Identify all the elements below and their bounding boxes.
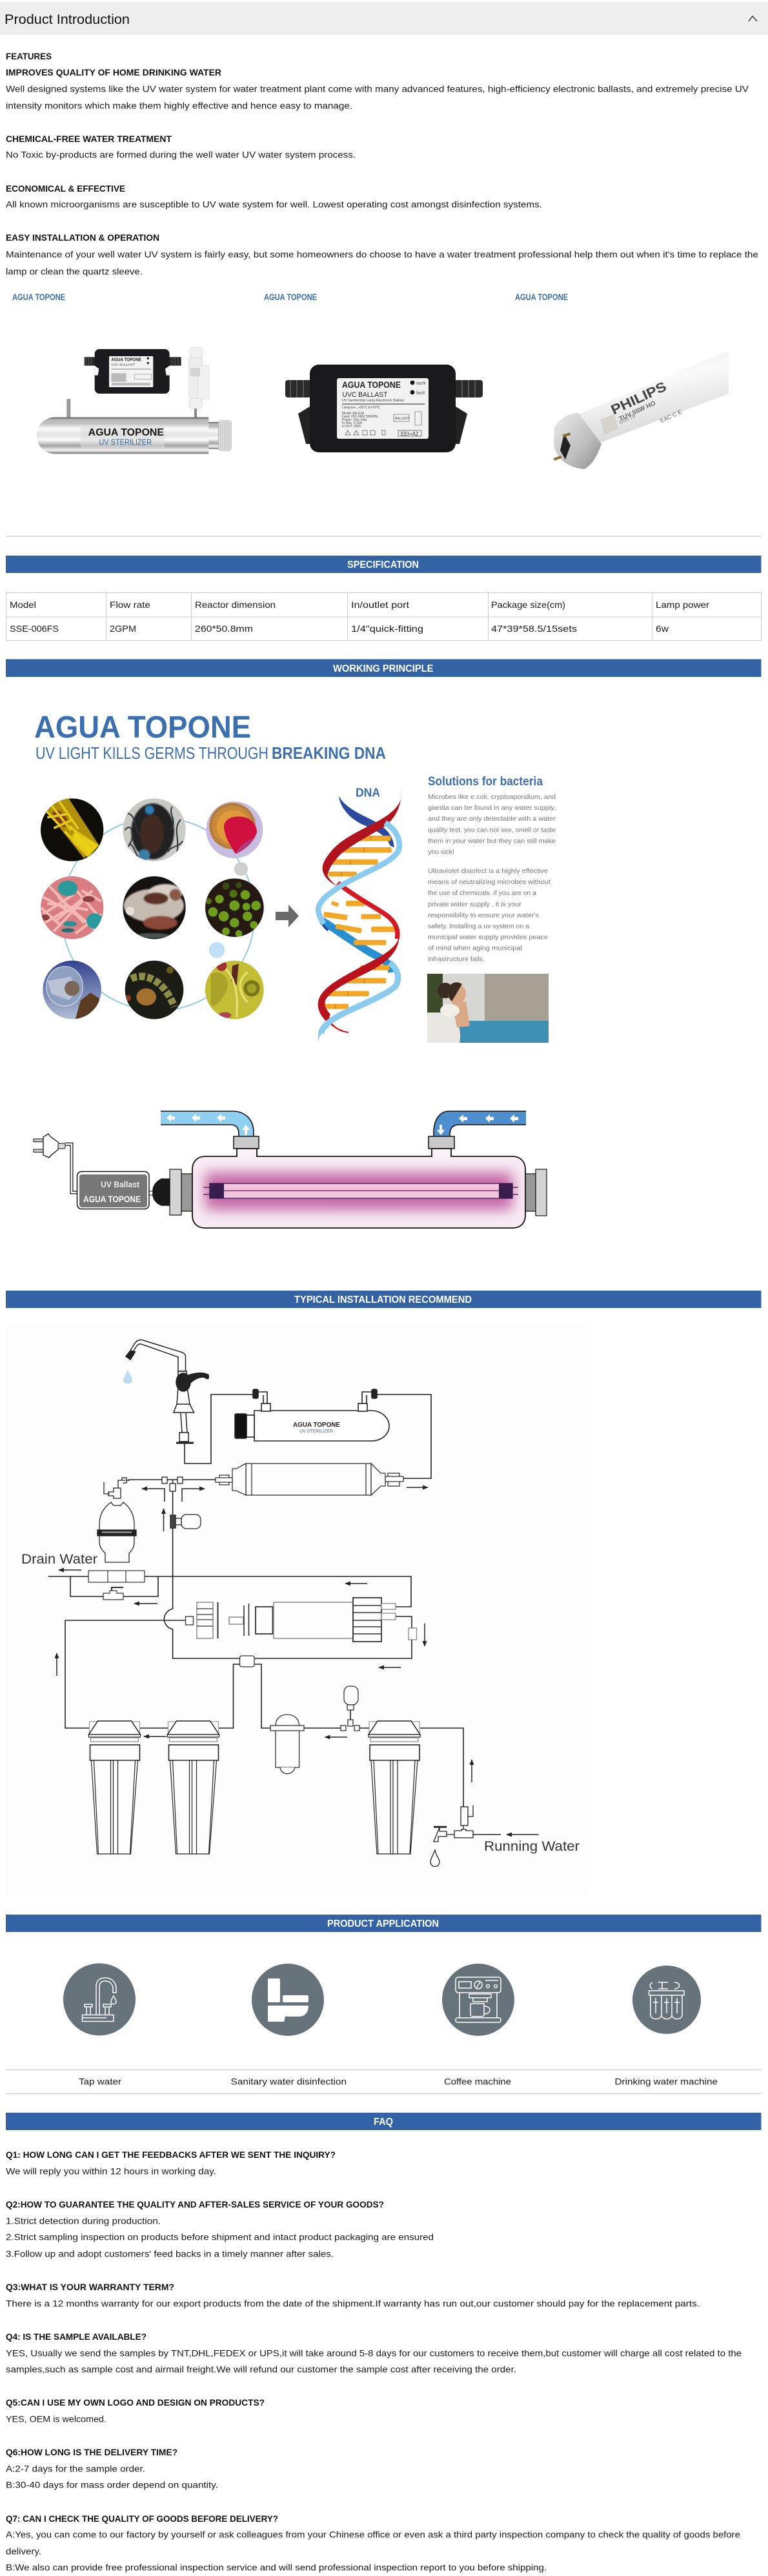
- flow restrictor and bypass valve: [88, 1571, 145, 1600]
- text block: solutions for bacteria: them in your water but they can still make: [428, 838, 556, 845]
- application: drinking water machine: [614, 1966, 718, 2087]
- section band: FAQ: [6, 2113, 762, 2130]
- text block: FAQ: There is a 12 months warranty for our export products from the date of the shipment.If warranty has run out,our customer should pay for the replacement parts.: [6, 2299, 700, 2309]
- section band: product application: PRODUCT APPLICATION: [327, 1918, 439, 1929]
- panel: product photo, sterilizer kit: [12, 292, 231, 454]
- UV lamp illustration: TUV 55W HO: [618, 400, 657, 423]
- text block: solutions for bacteria: Ultraviolet disinfect is a highly effective: [428, 867, 548, 875]
- text block: solutions for bacteria: quality test. you can not see, smell or taste: [428, 826, 556, 834]
- ballast illustration: Model: EB-G16: [342, 412, 364, 416]
- text block: solutions for bacteria: responsibility to ensure your water's: [428, 911, 539, 919]
- UV lamp illustration: G55 T8: [618, 413, 636, 425]
- text block: solutions for bacteria: Microbes like e.coli, cryptosporidium, and: [428, 793, 556, 801]
- text block: solutions for bacteria: private water supply , it is your: [428, 901, 522, 909]
- text block: FAQ: delivery.: [6, 2546, 41, 2557]
- text block: solutions for bacteria: giardia can be found in any water supply,: [428, 804, 556, 812]
- UV ballast box: AGUA TOPONE: [83, 1194, 141, 1204]
- label: drain water: Drain Water: [21, 1552, 97, 1567]
- UV lamp illustration: PHILIPS: [609, 379, 669, 418]
- table: specification: Package size(cm): [491, 599, 565, 610]
- logo: AGUA TOPONE: [515, 292, 568, 302]
- icon: filter cartridges: [632, 1966, 701, 2034]
- section band: working principle: WORKING PRINCIPLE: [333, 663, 434, 674]
- text block: FAQ: Q7: CAN I CHECK THE QUALITY OF GOODS BEFORE DELIVERY?: [6, 2513, 278, 2524]
- text block: features: EASY INSTALLATION & OPERATION: [6, 232, 159, 243]
- faucet: [123, 1340, 208, 1443]
- sterilizer kit illustration: UV STERILIZER: [99, 438, 152, 447]
- dividers around application labels: [6, 2070, 762, 2093]
- text block: FAQ: Q3:WHAT IS YOUR WARRANTY TERM?: [6, 2282, 174, 2292]
- section band: specification: [6, 556, 762, 573]
- tubing: [48, 1394, 501, 1835]
- table: specification: [6, 592, 762, 640]
- text block: features: lamp or clean the quartz sleeve.: [6, 266, 143, 276]
- table: specification: 47*39*58.5/15sets: [491, 623, 577, 634]
- title: UV light kills germs: [34, 710, 386, 763]
- icon: toilet: [252, 1964, 324, 2036]
- arrow: to DNA: [276, 905, 299, 927]
- text block: features: FEATURES: [6, 51, 52, 61]
- icon: collapse chevron: [749, 16, 757, 21]
- text block: FAQ: B:30-40 days for mass order depend on quantity.: [6, 2479, 218, 2490]
- ballast illustration: UV Germicidal Lamp Electronic Ballast: [342, 399, 404, 403]
- text block: FAQ: YES, Usually we send the samples by TNT,DHL,FEDEX or UPS,it will take around 5-8 days for our customers to receive them,but customer will charge all cost related to the: [6, 2348, 742, 2358]
- ballast illustration: Input: 220-240V 50/60Hz: [342, 415, 378, 419]
- application: sanitary water disinfection: [231, 1964, 347, 2087]
- ballast illustration: UVC BALLAST: [342, 391, 388, 399]
- outlet pipe: [161, 1111, 254, 1136]
- section band: specification: SPECIFICATION: [347, 559, 419, 570]
- UV ballast box: [77, 1172, 149, 1209]
- ballast illustration: EEI=A2: [401, 431, 419, 437]
- RO membrane housing: [186, 1598, 417, 1667]
- icon: coffee machine: [442, 1964, 514, 2036]
- panel: product photo, ballast: [264, 292, 483, 452]
- text block: FAQ: 2.Strict sampling inspection on products before shipment and intact product packaging are ensured: [6, 2231, 434, 2242]
- text block: solutions for bacteria: municipal water supply provides peace: [428, 933, 548, 941]
- ballast illustration: work: [416, 381, 426, 386]
- logo: AGUA TOPONE: [12, 292, 65, 302]
- section band: typical installation recommend: TYPICAL INSTALLATION RECOMMEND: [294, 1294, 472, 1305]
- label: Drinking water machine: [614, 2077, 718, 2087]
- photo: woman in pool: [427, 974, 549, 1043]
- text block: solutions for bacteria: you sick!: [428, 848, 454, 856]
- table: specification: Reactor dimension: [195, 599, 276, 610]
- arrows: [57, 1487, 538, 1835]
- text block: solutions for bacteria: infrastructure fails.: [428, 955, 485, 963]
- title: UV light kills germs: BREAKING DNA: [272, 743, 386, 763]
- UV sterilizer unit: AGUA TOPONE: [293, 1422, 340, 1429]
- ballast illustration: fault: [416, 391, 425, 396]
- section band: typical installation recommend: [6, 1291, 762, 1308]
- ballast illustration: In Max: 0.15A: [342, 421, 363, 425]
- inlet valves and tap: [430, 1806, 473, 1866]
- logo: AGUA TOPONE: [264, 292, 317, 302]
- inlet pipe: [434, 1111, 526, 1136]
- UV sterilizer unit: [235, 1389, 389, 1441]
- text block: features: [6, 51, 758, 276]
- application: tap water: [63, 1963, 136, 2087]
- text block: FAQ: We will reply you within 12 hours in working day.: [6, 2166, 216, 2176]
- text block: features: intensity monitors which make them highly effective and hence easy to manage.: [6, 101, 352, 111]
- text block: features: No Toxic by-products are formed during the well water UV water system process.: [6, 150, 356, 160]
- ballast illustration: AGUA TOPONE: [342, 379, 401, 390]
- label: DNA: DNA: [356, 786, 380, 799]
- label: Sanitary water disinfection: [231, 2077, 347, 2087]
- section band: product application: [6, 1915, 762, 1932]
- UV lamp illustration: EAC C E: [659, 408, 683, 424]
- table: specification: 6w: [656, 623, 669, 634]
- text block: solutions for bacteria: and they are only detectable with a water: [428, 815, 556, 823]
- pipe connectors: [234, 1136, 454, 1149]
- text block: FAQ: YES, OEM is welcomed.: [6, 2413, 106, 2424]
- post carbon filter: [216, 1464, 403, 1495]
- sterilizer kit illustration: AGUA TOPONE: [88, 427, 164, 438]
- table: specification: Model: [10, 599, 36, 610]
- text block: solutions for bacteria: [428, 775, 556, 963]
- sterilizer kit illustration: [37, 347, 231, 454]
- text block: features: Maintenance of your well water UV system is fairly easy, but some homeowners do choose to have a water treatment professional help them out when it's time to replace the: [6, 249, 758, 259]
- title: UV light kills germs: UV LIGHT KILLS GERMS THROUGH: [35, 743, 268, 763]
- text block: solutions for bacteria: Solutions for bacteria: [428, 775, 543, 789]
- text block: FAQ: Q6:HOW LONG IS THE DELIVERY TIME?: [6, 2447, 177, 2457]
- table: specification: 1/4"quick-fitting: [351, 623, 423, 634]
- text block: FAQ: Q5:CAN I USE MY OWN LOGO AND DESIGN ON PRODUCTS?: [6, 2397, 265, 2408]
- ballast illustration: Power: 12w~18w: [342, 418, 367, 422]
- table: specification: 2GPM: [110, 623, 136, 634]
- ballast illustration: Lamp:ta=...+55°C tc=70°C: [342, 406, 380, 410]
- UV ballast box: UV Ballast: [101, 1180, 140, 1189]
- text block: features: Well designed systems like the UV water system for water treatment plant come with many advanced features, high-efficiency electronic ballasts, and extremely precise UV: [6, 84, 749, 94]
- table: specification: Flow rate: [110, 599, 150, 610]
- end flanges: [153, 1169, 547, 1216]
- text block: FAQ: samples,such as sample cost and airmail freight.We will refund our customer the sample cost after receiving the order.: [6, 2364, 516, 2375]
- sterilizer kit illustration: AGUA TOPONE: [111, 356, 141, 362]
- UV sterilizer unit: UV STERILIZER: [299, 1429, 333, 1434]
- ballast illustration: [285, 365, 483, 452]
- UV lamp: [203, 1183, 518, 1198]
- label: running water: Running Water: [484, 1839, 580, 1854]
- table: specification: Lamp power: [656, 599, 709, 610]
- label: Tap water: [79, 2077, 121, 2087]
- text block: FAQ: 1.Strict detection during production.: [6, 2216, 161, 2226]
- diagram: UV reactor working principle: [34, 1111, 547, 1228]
- section band: working principle: [6, 659, 762, 677]
- text block: features: All known microorganisms are susceptible to UV wate system for well. Lowest operating cost amongst disinfection systems.: [6, 199, 542, 209]
- title: UV light kills germs: AGUA TOPONE: [34, 710, 251, 745]
- storage tank and valves: [97, 1477, 201, 1562]
- helix strands and rungs: [318, 793, 401, 1041]
- text block: FAQ: [6, 2149, 742, 2572]
- icon: tap: [63, 1963, 136, 2035]
- inline filter: [270, 1686, 359, 1774]
- DNA helix: [318, 786, 401, 1041]
- diagram: installation schematic: [6, 1325, 586, 1897]
- ballast illustration: U-OUT: 350V: [342, 425, 361, 428]
- header: product introduction: [0, 2, 768, 35]
- text block: FAQ: A:Yes, you can come to our factory by yourself or ask colleagues from your Chinese office or even ask a third party inspection company to check the quality of goods before: [6, 2530, 740, 2540]
- ballast illustration: BALLAST: [395, 417, 409, 421]
- table: specification: 260*50.8mm: [195, 623, 253, 634]
- reactor chamber with UV glow: [192, 1149, 525, 1228]
- text block: FAQ: Q4: IS THE SAMPLE AVAILABLE?: [6, 2331, 147, 2342]
- power cord and plug: [34, 1134, 77, 1192]
- text block: solutions for bacteria: of mind when aging municipal: [428, 945, 522, 952]
- text block: FAQ: Q2:HOW TO GUARANTEE THE QUALITY AND AFTER-SALES SERVICE OF YOUR GOODS?: [6, 2199, 384, 2209]
- table: specification: In/outlet port: [351, 599, 409, 610]
- text block: solutions for bacteria: means of neutralizing microbes without: [428, 878, 551, 886]
- heading: product introduction: Product Introduction: [5, 12, 130, 27]
- table: specification: SSE-006FS: [10, 623, 59, 634]
- microbe circles: [39, 796, 265, 1021]
- text block: FAQ: 3.Follow up and adopt customers' feed backs in a timely manner after sales.: [6, 2248, 334, 2259]
- text block: solutions for bacteria: the use of chemicals. if you are on a: [428, 889, 536, 897]
- UV lamp illustration: [554, 350, 729, 469]
- section band: FAQ: FAQ: [374, 2117, 393, 2128]
- panel: product photo, UV lamp: [515, 292, 729, 469]
- text block: features: CHEMICAL-FREE WATER TREATMENT: [6, 134, 172, 144]
- sterilizer kit illustration: UVC BALLAST: [111, 363, 135, 367]
- text block: features: ECONOMICAL & EFFECTIVE: [6, 183, 125, 194]
- label: Coffee machine: [444, 2077, 511, 2087]
- text block: FAQ: A:2-7 days for the sample order.: [6, 2464, 145, 2474]
- flow arrows: [167, 1114, 518, 1135]
- application: coffee machine: [442, 1964, 514, 2087]
- text block: FAQ: Q1: HOW LONG CAN I GET THE FEEDBACKS AFTER WE SENT THE INQUIRY?: [6, 2149, 336, 2160]
- divider: [6, 536, 762, 537]
- text block: FAQ: B:We also can provide free professional inspection service and will send professional inspection report to you before shipping.: [6, 2562, 547, 2572]
- pre-filter housings: [89, 1721, 420, 1854]
- text block: features: IMPROVES QUALITY OF HOME DRINKING WATER: [6, 67, 221, 77]
- text block: solutions for bacteria: safety. Installing a uv system on a: [428, 923, 529, 931]
